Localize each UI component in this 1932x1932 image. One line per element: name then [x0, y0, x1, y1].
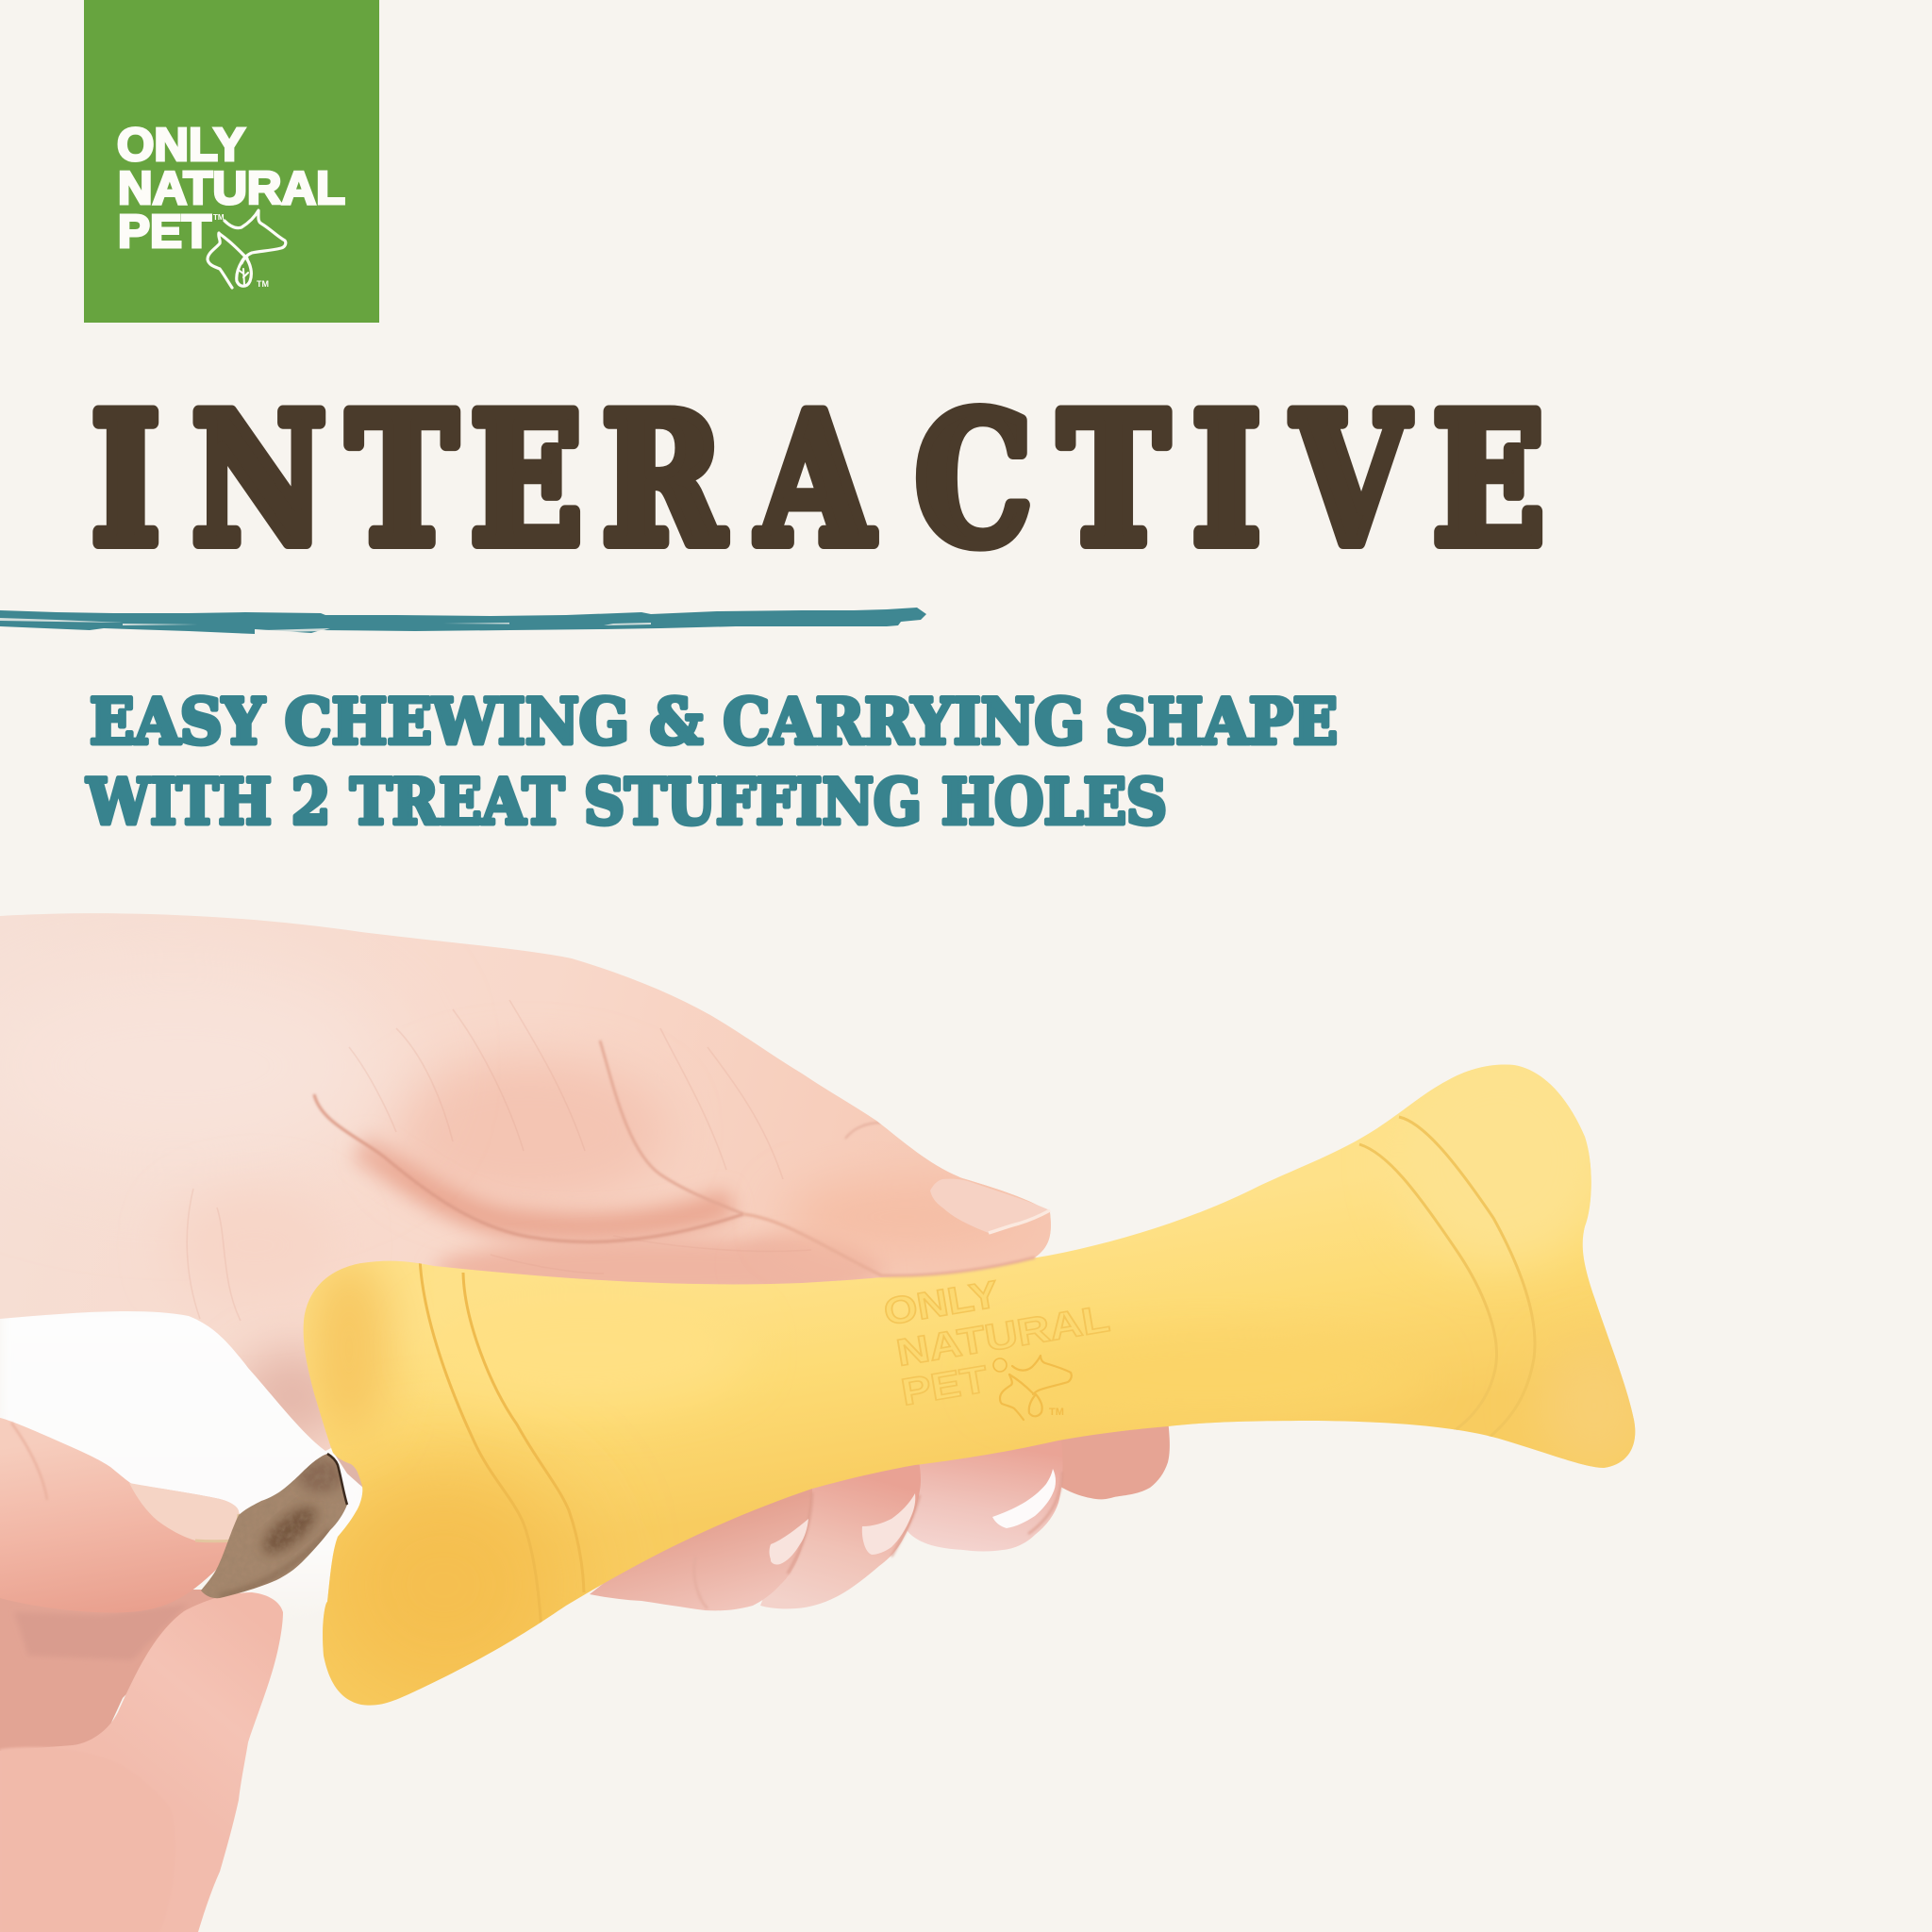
logo wordmark: ONLY — [117, 120, 245, 171]
embossed logo on toy: PET — [898, 1358, 991, 1414]
finger shadow lines — [694, 1472, 1062, 1608]
brush stroke divider — [0, 608, 926, 634]
dry brush slivers — [0, 618, 651, 632]
embossed logo on toy — [881, 1256, 1119, 1420]
inner fingers shadow — [0, 1590, 226, 1759]
thumb tip over the toy — [743, 1050, 1051, 1278]
logo wordmark — [117, 120, 345, 258]
embossed logo on toy: NATURAL — [893, 1298, 1112, 1374]
logo wordmark: PET — [118, 207, 211, 258]
trademark marks: TM — [213, 213, 225, 222]
thumb nail — [930, 1179, 1050, 1233]
first finger and palm edge — [590, 1472, 812, 1610]
upper finger — [0, 1418, 240, 1612]
subtitle — [86, 685, 1338, 839]
pale nails — [992, 1469, 1056, 1528]
holding hand: fingers under the toy — [590, 1420, 1170, 1610]
trademark marks: TM — [257, 279, 269, 289]
embossed logo on toy: ONLY — [881, 1274, 1002, 1333]
icon: dog, cat and leaf line mark — [208, 210, 286, 288]
logo wordmark: NATURAL — [118, 163, 345, 214]
middle finger — [896, 1429, 1062, 1551]
lower pad — [0, 1747, 175, 1932]
title: INTERACTIVE — [92, 375, 1544, 585]
ring finger — [1038, 1420, 1170, 1499]
trademark marks — [213, 213, 269, 289]
holding hand: palm and thumb — [0, 913, 1051, 1451]
knuckle crease — [11, 1423, 47, 1500]
subtitle: EASY CHEWING & CARRYING SHAPE — [90, 685, 1338, 758]
second finger — [760, 1453, 921, 1608]
upper finger nail — [129, 1483, 239, 1541]
subtitle: WITH 2 TREAT STUFFING HOLES — [86, 765, 1167, 839]
embossed dog, cat and leaf mark — [993, 1356, 1072, 1420]
palm seen through the toy notch — [335, 1455, 364, 1489]
pinching hand — [0, 1418, 283, 1932]
thumb lower edge shadow — [743, 1214, 1035, 1275]
ridges — [420, 1117, 1535, 1630]
lower finger — [0, 1592, 283, 1932]
skin creases — [187, 1000, 811, 1321]
thumb web fold — [600, 1041, 743, 1214]
embossed trademark: TM — [1049, 1407, 1064, 1418]
toy: yellow bone — [304, 1057, 1651, 1707]
treat in the toy hole — [201, 1453, 349, 1598]
palm fold — [314, 1094, 743, 1241]
white glow behind the pinching fingers — [0, 1307, 368, 1623]
panel: brand logo block — [84, 0, 379, 323]
